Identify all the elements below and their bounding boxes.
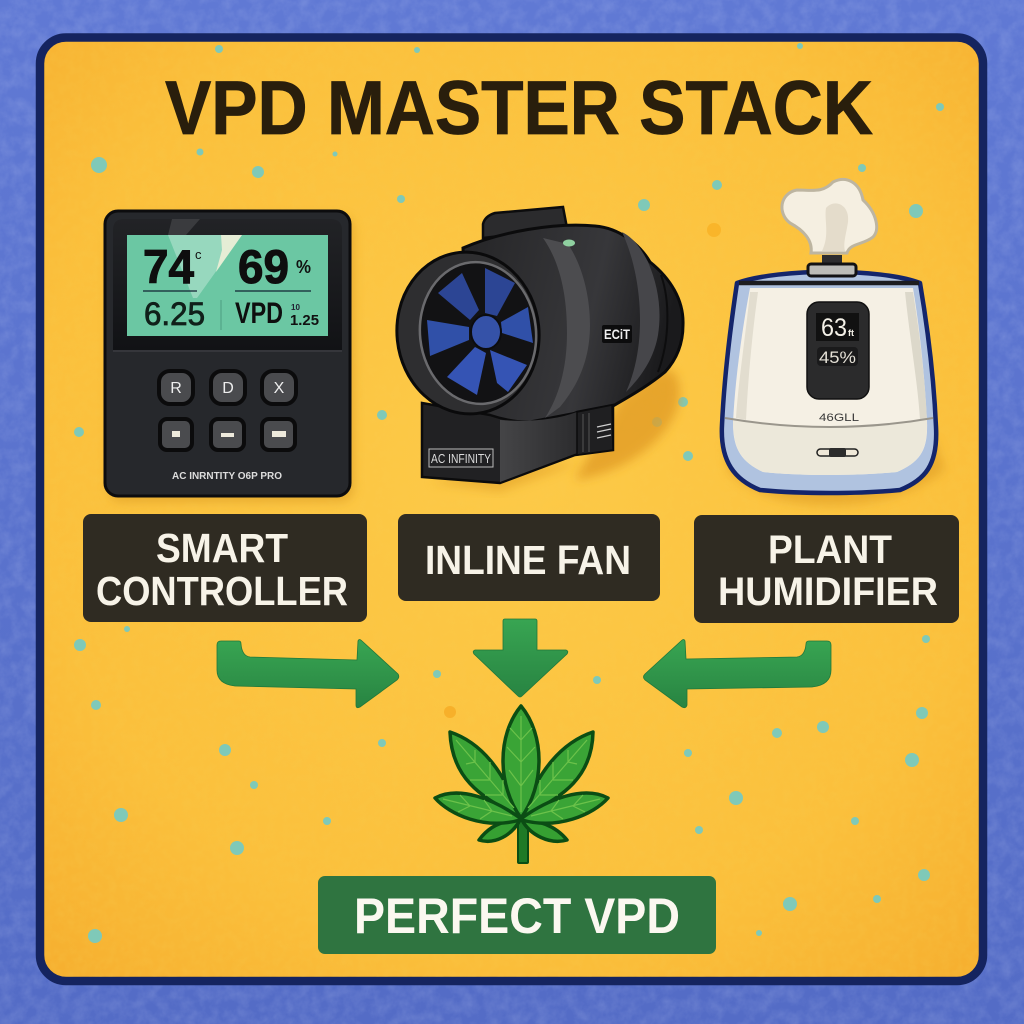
- controller screen: VPD: [235, 297, 283, 330]
- result banner: PERFECT VPD: [354, 888, 680, 944]
- icon: smart controller: [105, 211, 354, 502]
- humidifier body: [722, 272, 936, 493]
- label: plant humidifier: PLANT: [768, 528, 892, 572]
- arrow: down to center: [473, 619, 568, 697]
- humidifier capacity text: 46GLL: [819, 412, 859, 424]
- fan brand plate: AC INFINITY: [431, 452, 492, 466]
- fan side clip: [577, 405, 613, 455]
- label: plant humidifier: [694, 515, 959, 623]
- controller buttons: R: [170, 380, 182, 397]
- controller screen: %: [296, 257, 311, 277]
- icon: inline fan: [389, 207, 683, 492]
- small lower leaflets: [479, 820, 567, 841]
- humidifier nozzle: [808, 255, 856, 276]
- fan indicator light: [563, 240, 575, 246]
- controller screen: c: [195, 247, 202, 262]
- leaf stem: [518, 820, 528, 863]
- decorative speckles: [74, 43, 944, 943]
- humidifier display: ft: [848, 328, 854, 338]
- humidifier display: [807, 302, 869, 399]
- label: inline fan: [398, 514, 660, 601]
- title: VPD MASTER STACK: [165, 66, 873, 151]
- fan side badge: ECiT: [604, 326, 630, 342]
- fan blades: [427, 268, 533, 395]
- controller buttons: D: [222, 380, 234, 397]
- steam plume: [782, 179, 877, 253]
- controller screen: [127, 235, 328, 336]
- label: smart controller: [83, 514, 367, 622]
- humidifier display: 63: [821, 314, 847, 342]
- leaf veins: [443, 716, 600, 819]
- wide leaflets: [435, 706, 608, 823]
- arrow: left to center: [217, 640, 399, 708]
- label: smart controller: CONTROLLER: [96, 568, 348, 614]
- fan brand plate: [429, 449, 493, 467]
- humidifier display: 45%: [819, 348, 856, 367]
- controller buttons: [159, 371, 296, 450]
- arrow: right to center: [644, 640, 831, 708]
- controller screen: 74: [143, 240, 194, 293]
- controller screen: 6.25: [144, 296, 205, 332]
- controller screen: 1.25: [290, 312, 319, 329]
- icon: humidifier: [722, 179, 945, 505]
- controller screen: 69: [238, 240, 289, 293]
- controller screen: 10: [291, 303, 301, 312]
- controller model text: AC INRNTITY O6P PRO: [172, 471, 282, 482]
- label: inline fan: INLINE FAN: [425, 537, 631, 583]
- humidifier button: [817, 448, 858, 457]
- label: smart controller: SMART: [156, 525, 288, 571]
- result banner: [318, 876, 716, 954]
- fan top tab: [483, 207, 567, 238]
- fan body: [463, 225, 683, 422]
- fan base: [422, 403, 613, 483]
- controller buttons: X: [274, 380, 285, 397]
- label: plant humidifier: HUMIDIFIER: [718, 570, 938, 614]
- icon: cannabis leaf: [435, 706, 608, 863]
- fan front ring: [389, 245, 547, 421]
